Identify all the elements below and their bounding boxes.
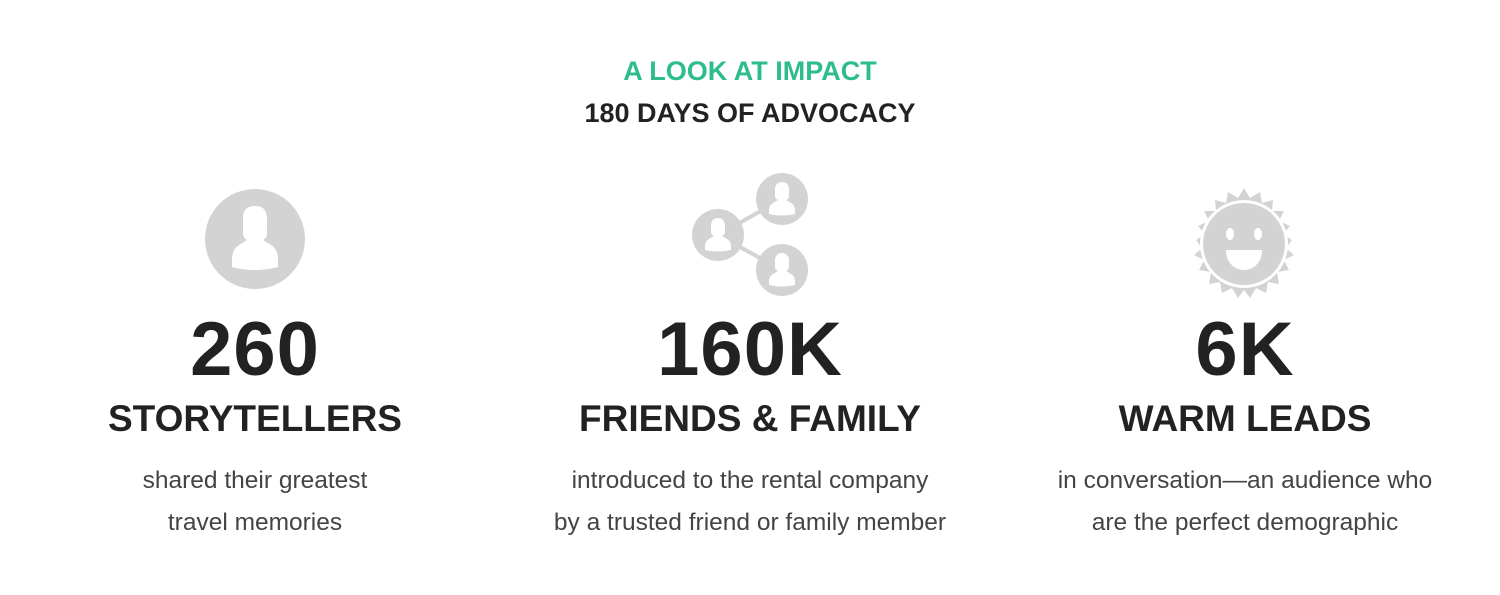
column 2 description: introduced to the rental company: [572, 467, 928, 494]
subtitle: 180 DAYS OF ADVOCACY: [584, 98, 916, 128]
column 2 number: 160K: [657, 307, 843, 392]
column 2 description: [554, 467, 946, 536]
column 1 description: [143, 467, 368, 536]
column 1 number: 260: [190, 307, 320, 392]
column 3 description: are the perfect demographic: [1092, 509, 1398, 536]
column 3 description: in conversation—an audience who: [1058, 467, 1432, 494]
column 1 label: STORYTELLERS: [108, 398, 402, 439]
column 1 description: shared their greatest: [143, 467, 367, 494]
column 3 label: WARM LEADS: [1119, 398, 1371, 439]
column 1 description: travel memories: [168, 509, 342, 536]
column 2 label: FRIENDS & FAMILY: [579, 398, 921, 439]
column 2 description: by a trusted friend or family member: [554, 509, 946, 536]
title: A LOOK AT IMPACT: [623, 56, 877, 86]
icon: smiling sun: [1194, 188, 1294, 298]
column 3 number: 6K: [1195, 307, 1295, 392]
icon: person: [205, 189, 305, 289]
column 3 description: [1058, 467, 1432, 536]
icon: network: [692, 173, 808, 296]
